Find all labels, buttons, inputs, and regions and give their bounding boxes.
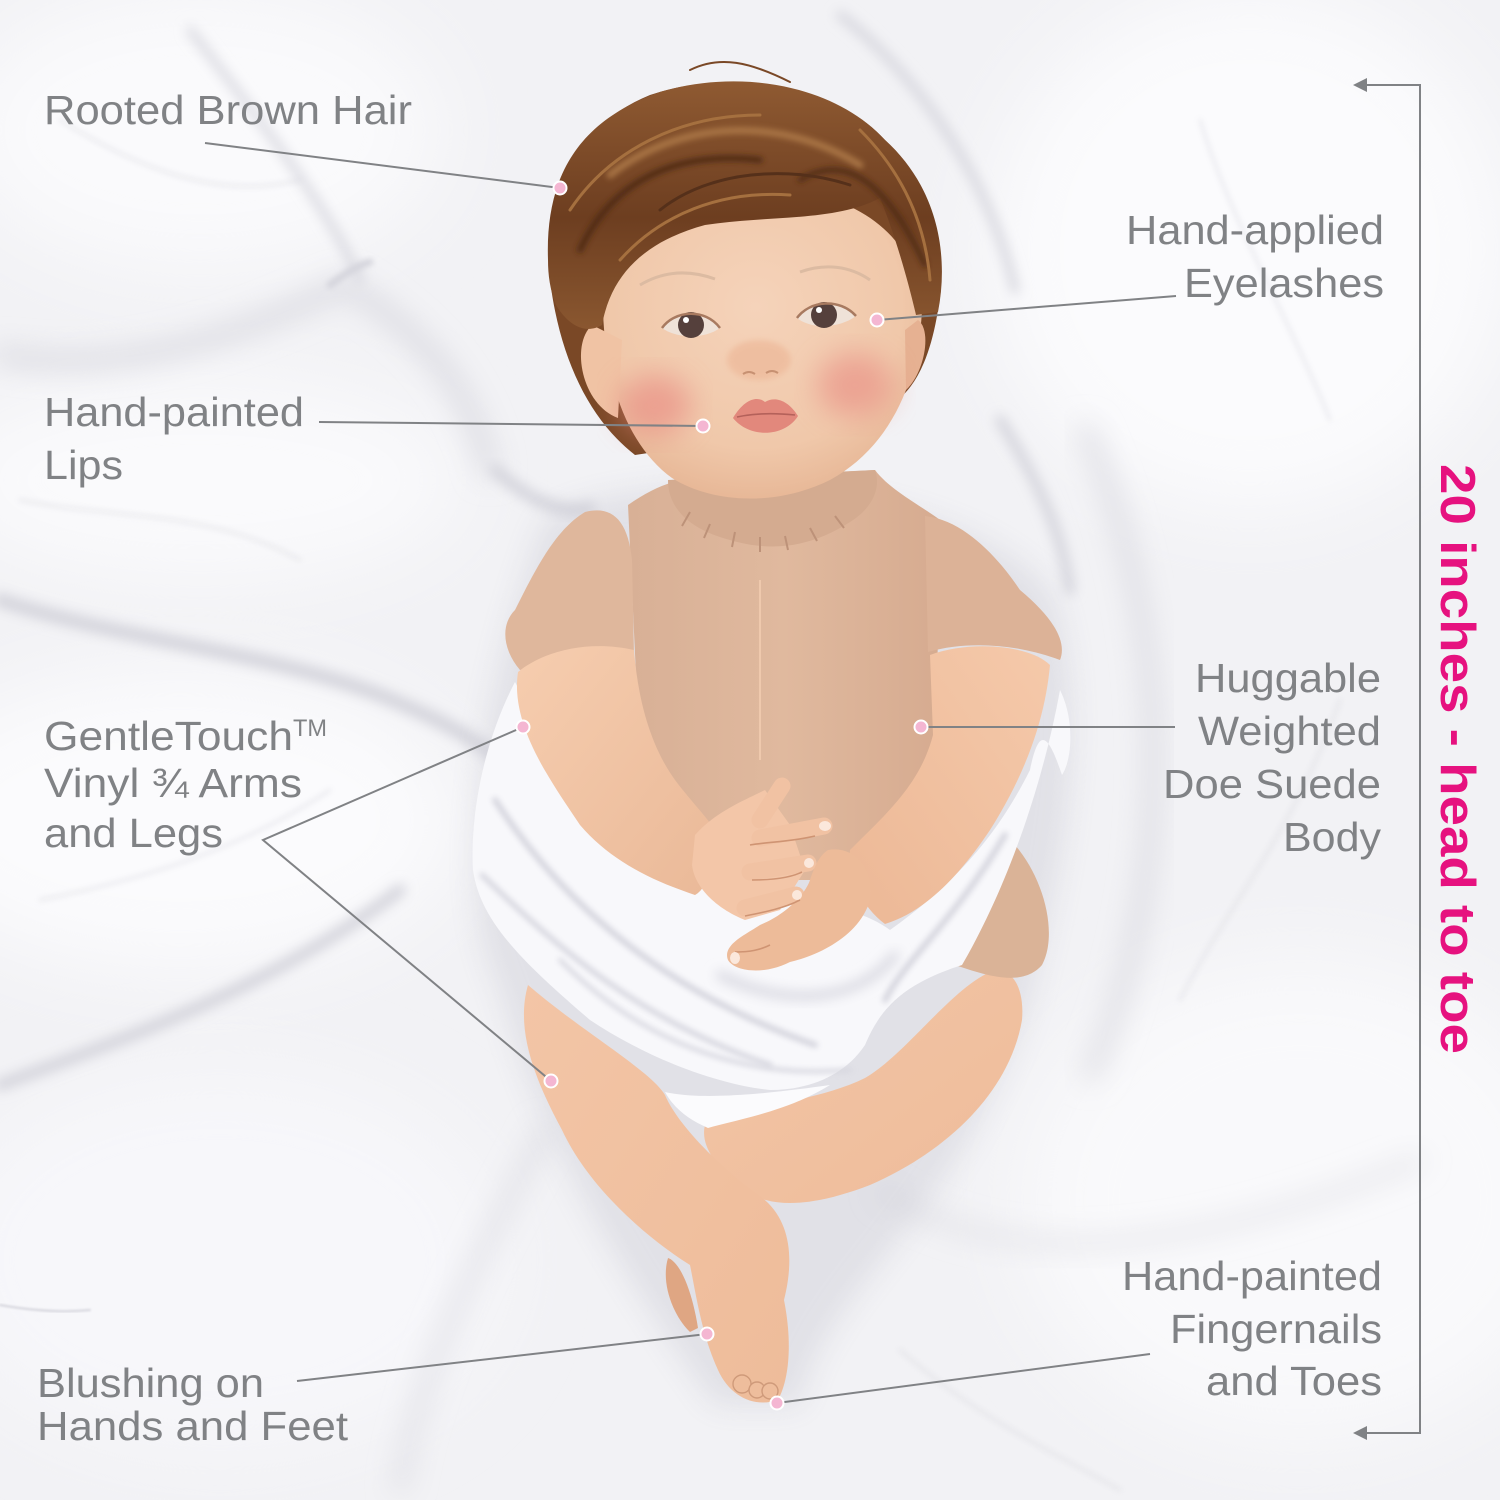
left leg [524, 985, 789, 1403]
callout: fingernails and toes [770, 1253, 1382, 1410]
right arm [850, 646, 1050, 924]
hair strands [570, 62, 930, 280]
hair top [548, 81, 942, 329]
hair back [548, 82, 941, 455]
callout: weighted body [914, 655, 1382, 860]
doe suede torso [628, 470, 940, 880]
arrowhead bottom [1353, 1426, 1367, 1440]
lower hand [727, 849, 871, 970]
callout: rooted brown hair [44, 87, 566, 194]
height bracket [1353, 78, 1420, 1433]
callout: rooted brown hair: Rooted Brown Hair [44, 87, 412, 133]
callout: vinyl arms and legs: and Legs [44, 810, 223, 856]
blanket [473, 682, 1070, 1090]
eyes [662, 302, 856, 338]
callout: eyelashes [870, 207, 1384, 326]
far foot [666, 1258, 698, 1332]
callout: blushing: Blushing on [37, 1360, 264, 1406]
head [548, 62, 942, 499]
arrowhead top [1353, 78, 1367, 92]
left ear [581, 325, 622, 418]
mouth [733, 399, 798, 433]
right leg [704, 971, 1022, 1203]
callout: weighted body: Weighted [1198, 708, 1381, 754]
soft shadow under doll [475, 487, 1072, 1405]
hands [692, 786, 871, 970]
callout: lips: Hand-painted [44, 389, 304, 435]
callout: fingernails and toes: Hand-painted [1122, 1253, 1382, 1299]
callout: vinyl arms and legs [44, 713, 558, 1088]
doll [473, 62, 1072, 1405]
brows [640, 273, 715, 285]
toes [733, 1375, 778, 1399]
callout: fingernails and toes: Fingernails [1170, 1306, 1382, 1352]
left sleeve [505, 510, 634, 670]
finger separations and nails [735, 836, 815, 952]
callout: fingernails and toes: and Toes [1206, 1358, 1382, 1404]
height label: 20 inches - head to toe [1430, 464, 1484, 1054]
right sleeve [925, 516, 1062, 660]
left arm [517, 646, 715, 895]
callout: lips: Lips [44, 442, 123, 488]
blanket under legs [665, 1085, 830, 1128]
upper hand palm [692, 790, 805, 920]
callout: eyelashes: Hand-applied [1126, 207, 1384, 253]
callout: lips [44, 389, 710, 488]
face [602, 190, 922, 499]
right ear [905, 320, 925, 390]
callout: weighted body: Doe Suede [1163, 761, 1381, 807]
callout: vinyl arms and legs: GentleTouch [44, 713, 293, 759]
hip cloth [955, 845, 1049, 978]
collar [668, 470, 877, 552]
callout: vinyl arms and legs: TM [293, 715, 327, 742]
nose [727, 340, 791, 380]
upper hand fingers [745, 786, 824, 908]
callout: weighted body: Body [1283, 814, 1382, 860]
callout: blushing [37, 1328, 714, 1449]
callout: eyelashes: Eyelashes [1184, 260, 1384, 306]
callout: blushing: Hands and Feet [37, 1403, 349, 1449]
callout: vinyl arms and legs: Vinyl ¾ Arms [44, 760, 302, 806]
callout: weighted body: Huggable [1195, 655, 1381, 701]
cheeks [619, 375, 691, 435]
